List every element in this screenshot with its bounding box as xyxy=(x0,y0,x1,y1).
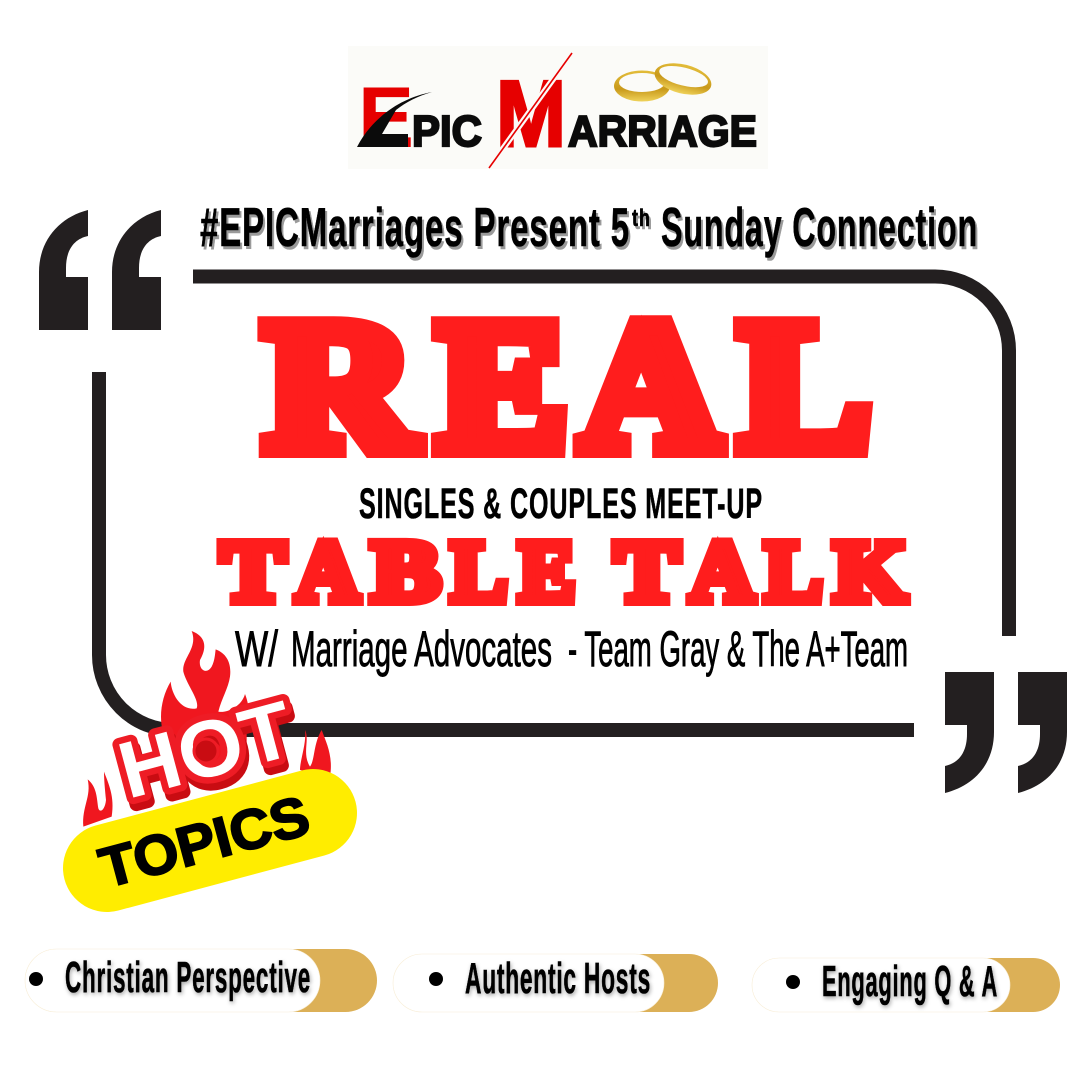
subtitle: singles and couples meet-up: SINGLES & COUPLES MEET-UP xyxy=(359,480,763,528)
closing quote mark xyxy=(945,672,1067,793)
pill: Christian Perspective: Christian Perspective xyxy=(65,953,311,1002)
logo: Epic Marriage: E xyxy=(358,70,414,166)
title: TABLE TALK: L xyxy=(451,522,507,620)
logo: Epic Marriage: M xyxy=(496,61,566,166)
heading: 5th Sunday Connection: #EPICMarriages Present 5 xyxy=(200,196,630,258)
HOT letter O centre xyxy=(194,739,218,763)
pill: Engaging Q and A xyxy=(752,957,1060,1012)
pill: Authentic Hosts xyxy=(393,954,718,1012)
pill: Christian Perspective xyxy=(25,949,377,1012)
logo: Epic Marriage xyxy=(348,46,768,169)
title: TABLE TALK: A xyxy=(690,522,754,620)
title: TABLE TALK: E xyxy=(519,522,575,620)
presenters line: W/ xyxy=(235,621,278,677)
title: REAL: E xyxy=(438,283,567,489)
flames xyxy=(83,631,331,827)
heading: 5th Sunday Connection: th xyxy=(632,205,651,232)
title: TABLE TALK: A xyxy=(296,522,359,620)
title: REAL: A xyxy=(581,283,720,489)
yellow pill xyxy=(107,813,313,868)
HOT lettering: HOT xyxy=(109,684,303,815)
TOPICS lettering: TOPICS xyxy=(93,783,316,900)
title: TABLE TALK: K xyxy=(834,522,906,620)
hot topics badge xyxy=(83,631,331,900)
title: REAL: L xyxy=(740,283,870,489)
presenters line: Marriage Advocates xyxy=(291,621,552,677)
title: REAL xyxy=(265,283,870,489)
title: REAL: R xyxy=(265,283,417,489)
title: TABLE TALK: L xyxy=(765,522,822,620)
presenters line xyxy=(235,621,908,677)
title: TABLE TALK: T xyxy=(221,522,285,620)
logo: Epic Marriage: PIC xyxy=(412,107,482,156)
title: TABLE TALK: T xyxy=(615,522,679,620)
title: TABLE TALK: B xyxy=(372,522,440,620)
speech frame xyxy=(99,276,1009,730)
logo: Epic Marriage: ARRIAGE xyxy=(568,107,757,156)
title: TABLE TALK xyxy=(221,522,906,620)
opening quote mark xyxy=(39,210,161,330)
pill: Authentic Hosts: Authentic Hosts xyxy=(465,954,651,1003)
